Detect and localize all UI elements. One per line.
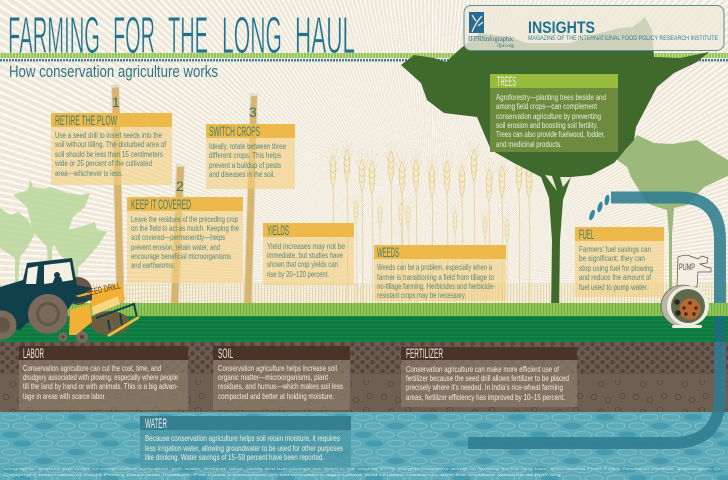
signpost 1: [111, 84, 125, 305]
panel: yields: [263, 223, 354, 285]
pump: PUMP: [679, 262, 695, 273]
seed drill: SEED DRILL: [85, 280, 122, 298]
left background trees: [0, 179, 107, 282]
panel: weeds: resistant crops may be necessary.: [377, 290, 466, 300]
panel: trees: soil erosion and boosting soil fertility.: [496, 120, 598, 130]
publisher box: [464, 6, 724, 50]
panel: retire the plow: wide or 25 percent of the cultivated: [54, 158, 152, 168]
panel: labor: till the land by hand or with animals. This is a big advan-: [23, 381, 178, 391]
panel: trees: TREES: [497, 74, 516, 89]
panel: water: Because conservation agriculture helps soil retain moisture, it requires: [145, 433, 340, 443]
panel: yields: rise by 20–120 percent.: [267, 269, 329, 279]
title: THE: [168, 7, 208, 65]
panel: soil: organic matter—microorganisms, plant: [218, 372, 328, 382]
underground pipe: [468, 316, 725, 443]
panel: keep it covered: [127, 197, 243, 283]
panel: water: less irrigation water, allowing groundwater to be used for other purposes: [145, 443, 343, 453]
signpost 2: [170, 164, 185, 305]
panel: yields: immediate, but studies have: [267, 250, 343, 260]
panel: retire the plow: soil without tilling. The disturbed area of: [55, 139, 166, 149]
panel: water: [140, 416, 351, 470]
panel: yields: shown that crop yields can: [267, 259, 338, 269]
wheat field: [327, 138, 535, 326]
panel: trees: Trees can also provide fuelwood, fodder,: [496, 129, 605, 139]
footnote: [3, 466, 725, 477]
panel: soil: Conservation agriculture helps increase soil: [218, 363, 337, 373]
tractor: [0, 258, 140, 343]
panel: fuel: stop using fuel for plowing: [579, 263, 653, 273]
panel: switch crops: Ideally, rotate between three: [209, 141, 286, 151]
panel: fuel: fuel used to pump water.: [579, 282, 648, 292]
panel: weeds: no-tillage farming. Herbicides and herbicide-: [377, 281, 495, 291]
panel: keep it covered: on the field to act as mulch. Keeping the: [131, 223, 239, 233]
panel: trees: among field crops—can complement: [496, 101, 597, 111]
panel: labor: LABOR: [23, 346, 44, 361]
panel: fuel: [575, 227, 664, 297]
title: [8, 7, 355, 65]
panel: trees: Agroforestry—planting trees beside and: [496, 92, 606, 102]
panel: switch crops: [206, 124, 295, 189]
hatched field grass behind signs: [0, 283, 728, 304]
panel: yields: Yield increases may not be: [267, 241, 345, 251]
panel: keep it covered: KEEP IT COVERED: [131, 197, 191, 212]
ground: grass, field: [0, 303, 728, 342]
big tree: [401, 17, 709, 316]
panel: fuel: be significant: they can: [579, 253, 645, 263]
panel: weeds: Weeds can be a problem, especially when a: [377, 262, 492, 272]
panel: weeds: WEEDS: [377, 245, 399, 260]
title rule: [0, 53, 728, 62]
panel: weeds: farmer is transitioning a field from tillage to: [377, 272, 494, 282]
panel: soil: [213, 346, 350, 410]
title: LONG: [222, 7, 282, 65]
signpost 1: 1: [112, 94, 120, 110]
text: HAUL: [295, 7, 355, 65]
panel: trees: and medicinal products.: [496, 139, 562, 149]
signpost 2: 2: [176, 178, 184, 194]
panel: yields: YIELDS: [267, 223, 289, 238]
panel: weeds: [374, 245, 506, 301]
panel: water: WATER: [145, 416, 167, 431]
panel: soil: compacted and better at holding moisture.: [218, 391, 334, 401]
panel: fertilizer: fertilizer because the seed drill allows fertilizer to be placed: [406, 373, 569, 383]
panel: labor: [19, 346, 188, 410]
panel: fertilizer: areas, fertilizer efficiency has improved by 10–15 percent.: [406, 392, 565, 402]
title: FARMING: [8, 7, 100, 65]
irrigation pipe: [468, 194, 720, 443]
panel: labor: Conservation agriculture can cut the cost, time, and: [23, 363, 161, 373]
signpost 3: 3: [249, 104, 257, 120]
panel: switch crops: different crops. This helps: [209, 150, 281, 160]
panel: retire the plow: [51, 113, 172, 185]
footnote: Copyright International Food Policy Research Institute. For more information on conservation agriculture and related research, see the institute website at ifpri.org.: [3, 472, 563, 477]
signpost 3: [243, 93, 258, 316]
panel: trees: conservation agriculture by preventing: [496, 111, 601, 121]
panel: retire the plow: area—whichever is less.: [55, 168, 123, 178]
panel: fuel: FUEL: [579, 227, 594, 242]
panel: fuel: and reduce the amount of: [579, 272, 651, 282]
panel: fertilizer: [401, 346, 577, 407]
publisher box: IFPRIinfographic: [468, 34, 515, 43]
panel: water: like drinking. Water savings of 15–50 percent have been reported.: [145, 452, 324, 462]
panel: fertilizer: Conservation agriculture can make more efficient use of: [406, 364, 559, 374]
panel: switch crops: SWITCH CROPS: [209, 124, 260, 139]
soil layer: [0, 342, 728, 412]
panel: keep it covered: prevent erosion, retain water, and: [131, 242, 220, 252]
panel: soil: SOIL: [218, 346, 233, 361]
panel: retire the plow: soil should be less than 15 centimeters: [55, 149, 163, 159]
footnote: Infographic: sources and notes on conservation agriculture, soil, water, fertilizer, labor, yields and fuel savings are listed in the original IFPRI Insights magazine article on farming for the long haul, International Food Policy Research Institute, Washington, DC.: [3, 466, 725, 471]
panel: fertilizer: precisely where it's needed. In India's rice-wheat farming: [406, 382, 563, 392]
right background tree: [616, 135, 728, 292]
panel: switch crops: prevent a buildup of pests: [209, 160, 281, 170]
panel: keep it covered: Leave the residues of the preceding crop: [131, 214, 238, 224]
seed drill: [69, 280, 140, 337]
title: FOR: [113, 7, 155, 65]
panel: fertilizer: FERTILIZER: [406, 346, 443, 361]
publisher box: INSIGHTS: [528, 18, 595, 37]
panel: soil: residues, and humus—which makes soil less: [218, 381, 343, 391]
subtitle: How conservation agriculture works: [9, 63, 218, 81]
publisher box: ifpri.org: [497, 44, 515, 49]
panel: keep it covered: soil covered—permanently—helps: [131, 232, 225, 242]
panel: fuel: Farmers' fuel savings can: [579, 244, 651, 254]
panel: labor: drudgery associated with plowing, especially where people: [23, 372, 178, 382]
panel: trees: [490, 74, 618, 152]
panel: keep it covered: encourage beneficial microorganisms: [131, 251, 231, 261]
panel: retire the plow: Use a seed drill to insert seeds into the: [55, 130, 162, 140]
panel: keep it covered: and earthworms.: [131, 260, 175, 270]
pump: [661, 255, 711, 328]
water layer: [0, 412, 728, 480]
panel: labor: tage in areas with scarce labor.: [23, 391, 106, 401]
panel: retire the plow: RETIRE THE PLOW: [55, 113, 117, 128]
panel: switch crops: and diseases in the soil.: [209, 169, 275, 179]
